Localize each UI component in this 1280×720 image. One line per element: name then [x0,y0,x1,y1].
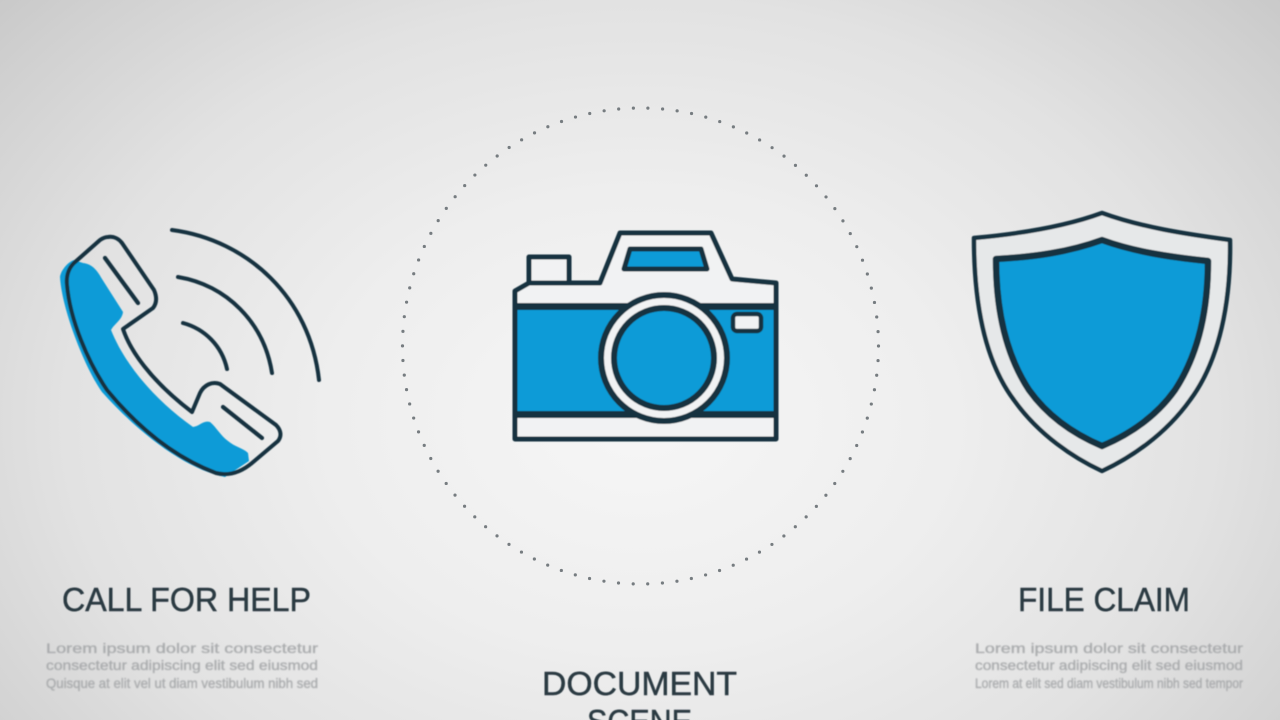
dotted circle [402,108,878,584]
flash box [529,257,569,283]
shield inner [996,240,1208,446]
text block: file claim: Lorem ipsum dolor sit consectetur [975,640,1243,656]
small window [733,314,761,331]
handset earpiece line [105,258,138,303]
handset blue fill [60,260,249,477]
text block: call for help: consectetur adipiscing elit sed eiusmod [46,657,318,673]
text block: file claim [975,640,1243,691]
viewfinder [624,249,707,269]
lens outer [601,295,727,421]
text block: call for help: Quisque at elit vel ut diam vestibulum nibh sed [46,675,318,691]
icon: phone handset with signal waves [60,230,319,477]
signal wave small [183,323,227,369]
text block: file claim: Lorem at elit sed diam vestibulum nibh sed tempor [975,675,1243,691]
heading: call for help: CALL FOR HELP [62,581,311,618]
text block: file claim: consectetur adipiscing elit sed eiusmod [975,657,1243,673]
heading: document scene: DOCUMENT [542,665,737,702]
handset outline [67,237,280,474]
text block: call for help [46,640,318,691]
heading: file claim: FILE CLAIM [1018,581,1190,618]
signal wave large [172,230,319,380]
text block: call for help: Lorem ipsum dolor sit consectetur [46,640,318,656]
lens inner [614,308,714,408]
camera dark band top [516,303,776,310]
heading: document scene [542,665,737,720]
icon: shield [974,213,1230,471]
camera outline [515,233,776,439]
camera blue band [516,307,776,413]
handset mouthpiece line [223,407,262,438]
camera body light [514,233,776,439]
signal wave medium [178,277,272,373]
icon: camera [514,233,776,439]
camera dark band bottom [516,411,776,418]
shield outer [974,213,1230,471]
